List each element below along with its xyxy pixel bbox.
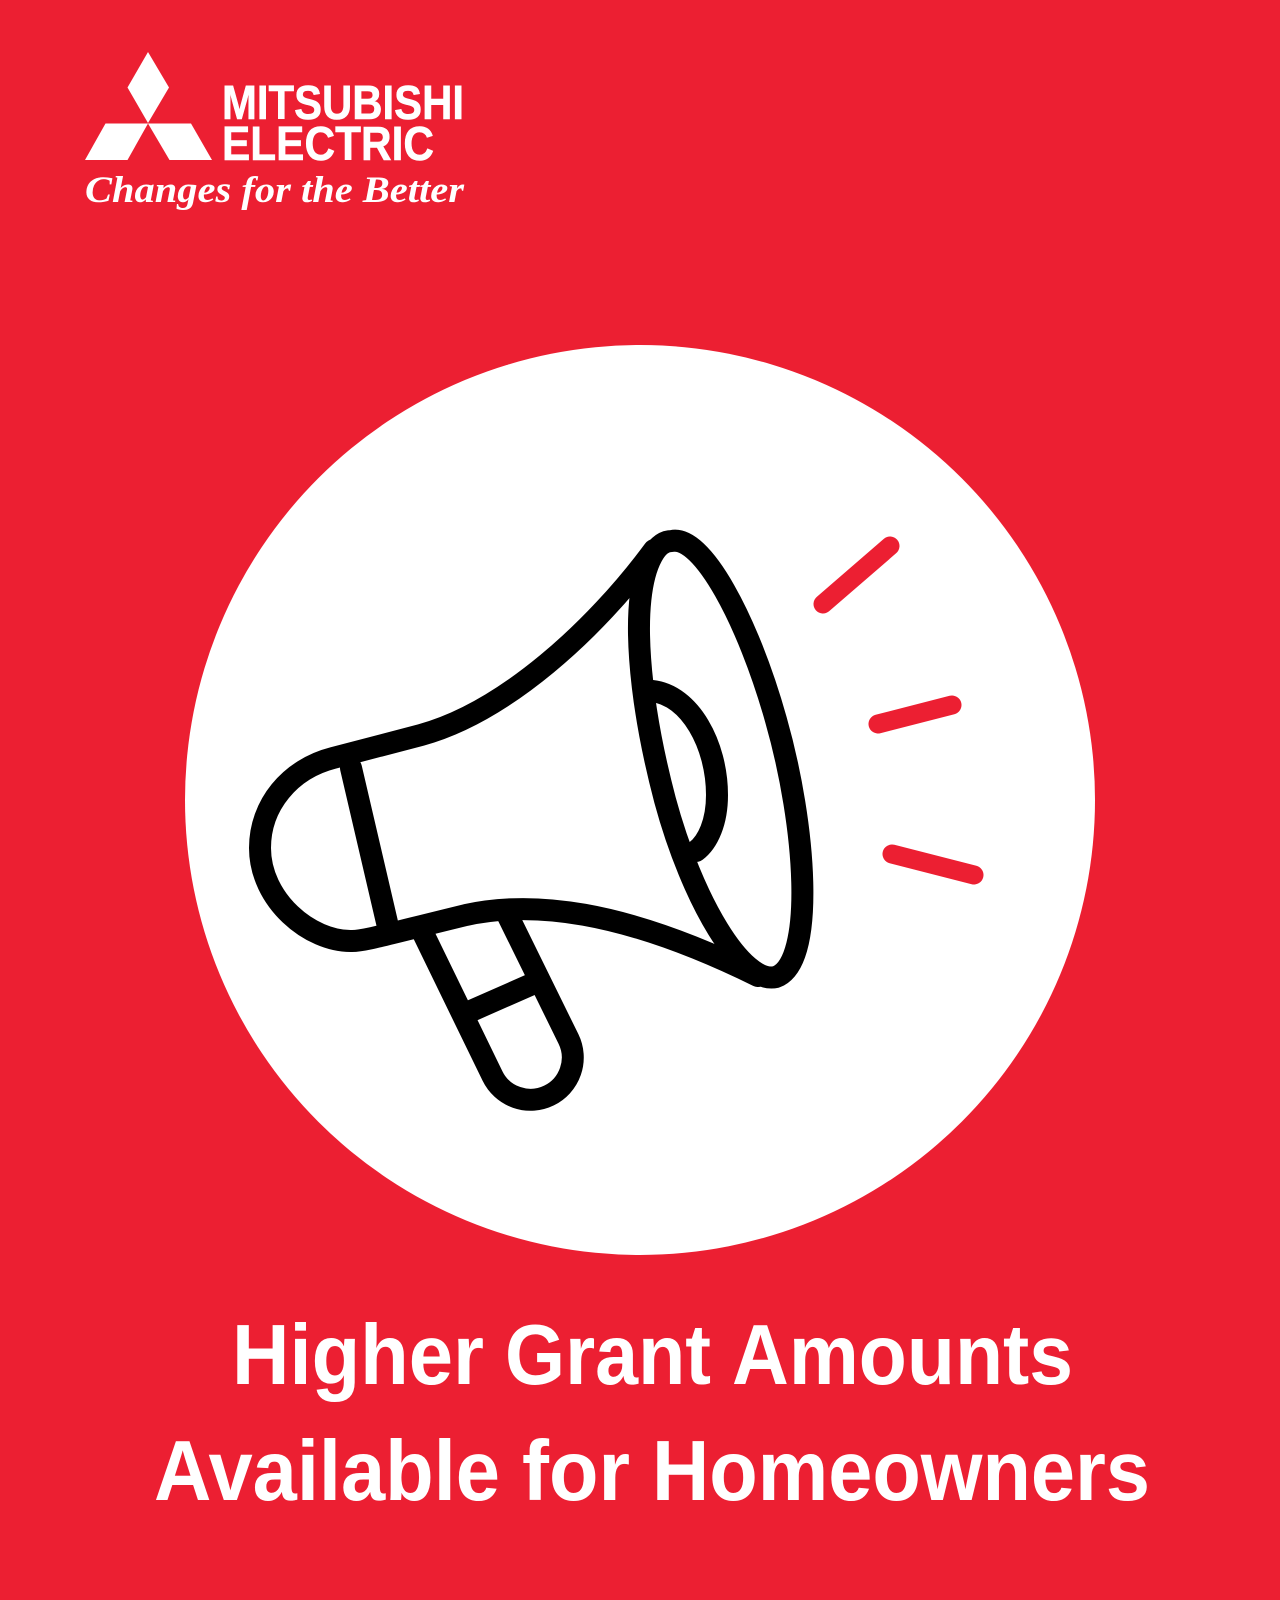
megaphone handle band: [471, 985, 530, 1011]
title line 1: Grant: [505, 1308, 711, 1403]
icon: three diamonds: [85, 52, 212, 160]
megaphone horn and back cap: [260, 550, 758, 976]
megaphone divider: [351, 768, 389, 931]
title line 1: Amounts: [732, 1308, 1073, 1403]
sound lines: [823, 546, 974, 875]
sound line middle: [878, 705, 952, 724]
icon: megaphone: [260, 541, 802, 1100]
white circle: [185, 345, 1095, 1255]
title line 1: Higher: [232, 1308, 484, 1403]
sound line bottom: [892, 854, 974, 875]
title line 2: [154, 1424, 1150, 1519]
title: [154, 1308, 1150, 1519]
title line 2: Homeowners: [652, 1424, 1150, 1519]
megaphone handle: [421, 916, 573, 1100]
logo: Mitsubishi Electric: [85, 52, 465, 211]
sound line top: [823, 546, 890, 604]
title line 2: for: [522, 1424, 630, 1519]
logo tagline: Changes for the Better: [85, 170, 465, 211]
title line 1: [232, 1308, 1073, 1403]
megaphone inner cone: [652, 691, 717, 851]
logo wordmark: Mitsubishi: MITSUBISHI: [222, 77, 464, 130]
title line 2: Available: [154, 1424, 500, 1519]
logo wordmark: Electric: ELECTRIC: [222, 118, 434, 171]
megaphone bell opening: [639, 541, 802, 978]
